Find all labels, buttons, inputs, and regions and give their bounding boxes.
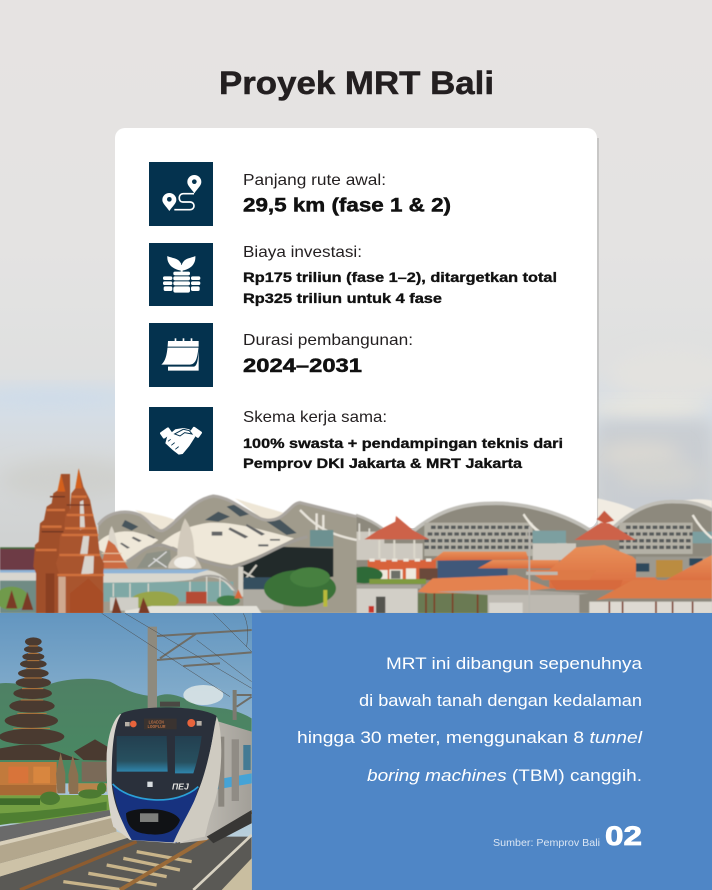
label: duration: Durasi pembangunan:	[243, 332, 413, 349]
pavilion left	[364, 516, 429, 539]
source: Sumber: Pemprov Bali	[493, 838, 600, 849]
value: cooperation scheme: 100% swasta + pendampingan teknis dari	[243, 435, 563, 451]
value: duration: 2024–2031	[243, 355, 362, 377]
label: route length: Panjang rute awal:	[243, 172, 386, 189]
description text	[297, 654, 643, 785]
rails	[63, 852, 192, 890]
description text: hingga 30 meter, menggunakan 8 tunnel	[297, 728, 643, 747]
panel: project facts card	[115, 128, 599, 528]
description text: boring machines (TBM) canggih.	[367, 766, 642, 785]
label: cooperation scheme: Skema kerja sama:	[243, 409, 387, 426]
terminal: wavy roof	[97, 494, 358, 613]
train front	[107, 714, 220, 843]
train logo: ΠEJ	[172, 781, 189, 791]
value: cooperation scheme	[243, 435, 563, 471]
page number: 02	[605, 821, 642, 851]
illustration: MRT train and Balinese temple	[0, 613, 252, 890]
icon: calendar	[149, 323, 213, 387]
panel: tunnel description	[252, 613, 712, 890]
central buildings	[438, 560, 508, 580]
pagoda	[0, 637, 80, 760]
destination display: LOOPLUR	[147, 725, 166, 730]
description text: di bawah tanah dengan kedalaman	[359, 691, 642, 710]
mountains	[0, 679, 252, 783]
lower roof	[418, 575, 551, 595]
icon: route with map pins	[149, 162, 213, 226]
destination display: LOADIN	[148, 720, 164, 725]
value: route length: 29,5 km (fase 1 & 2)	[243, 194, 451, 216]
label: investment: Biaya investasi:	[243, 244, 362, 261]
value: investment: Rp175 triliun (fase 1–2), ditargetkan total	[243, 269, 557, 285]
canopy and glass hall	[100, 582, 233, 602]
train side	[180, 720, 252, 843]
value: investment: Rp325 triliun untuk 4 fase	[243, 290, 442, 306]
catenary masts and wires	[148, 627, 157, 708]
value: cooperation scheme: Pemprov DKI Jakarta & MRT Jakarta	[243, 455, 522, 471]
pavilion right	[597, 511, 614, 523]
icon: plant growing from coins	[149, 243, 213, 306]
icon: handshake	[149, 407, 213, 471]
statues	[168, 518, 202, 568]
illustration: Bali airport terminal and temple	[0, 468, 712, 613]
ground and platform	[0, 795, 113, 823]
destination display	[148, 720, 166, 728]
title: Proyek MRT Bali	[219, 65, 494, 101]
terminal: right arches and pavilions	[346, 498, 712, 613]
sky background	[0, 0, 712, 613]
temple gate and left scenery	[0, 468, 150, 613]
description text: MRT ini dibangun sepenuhnya	[386, 654, 643, 673]
value: investment	[243, 269, 557, 306]
